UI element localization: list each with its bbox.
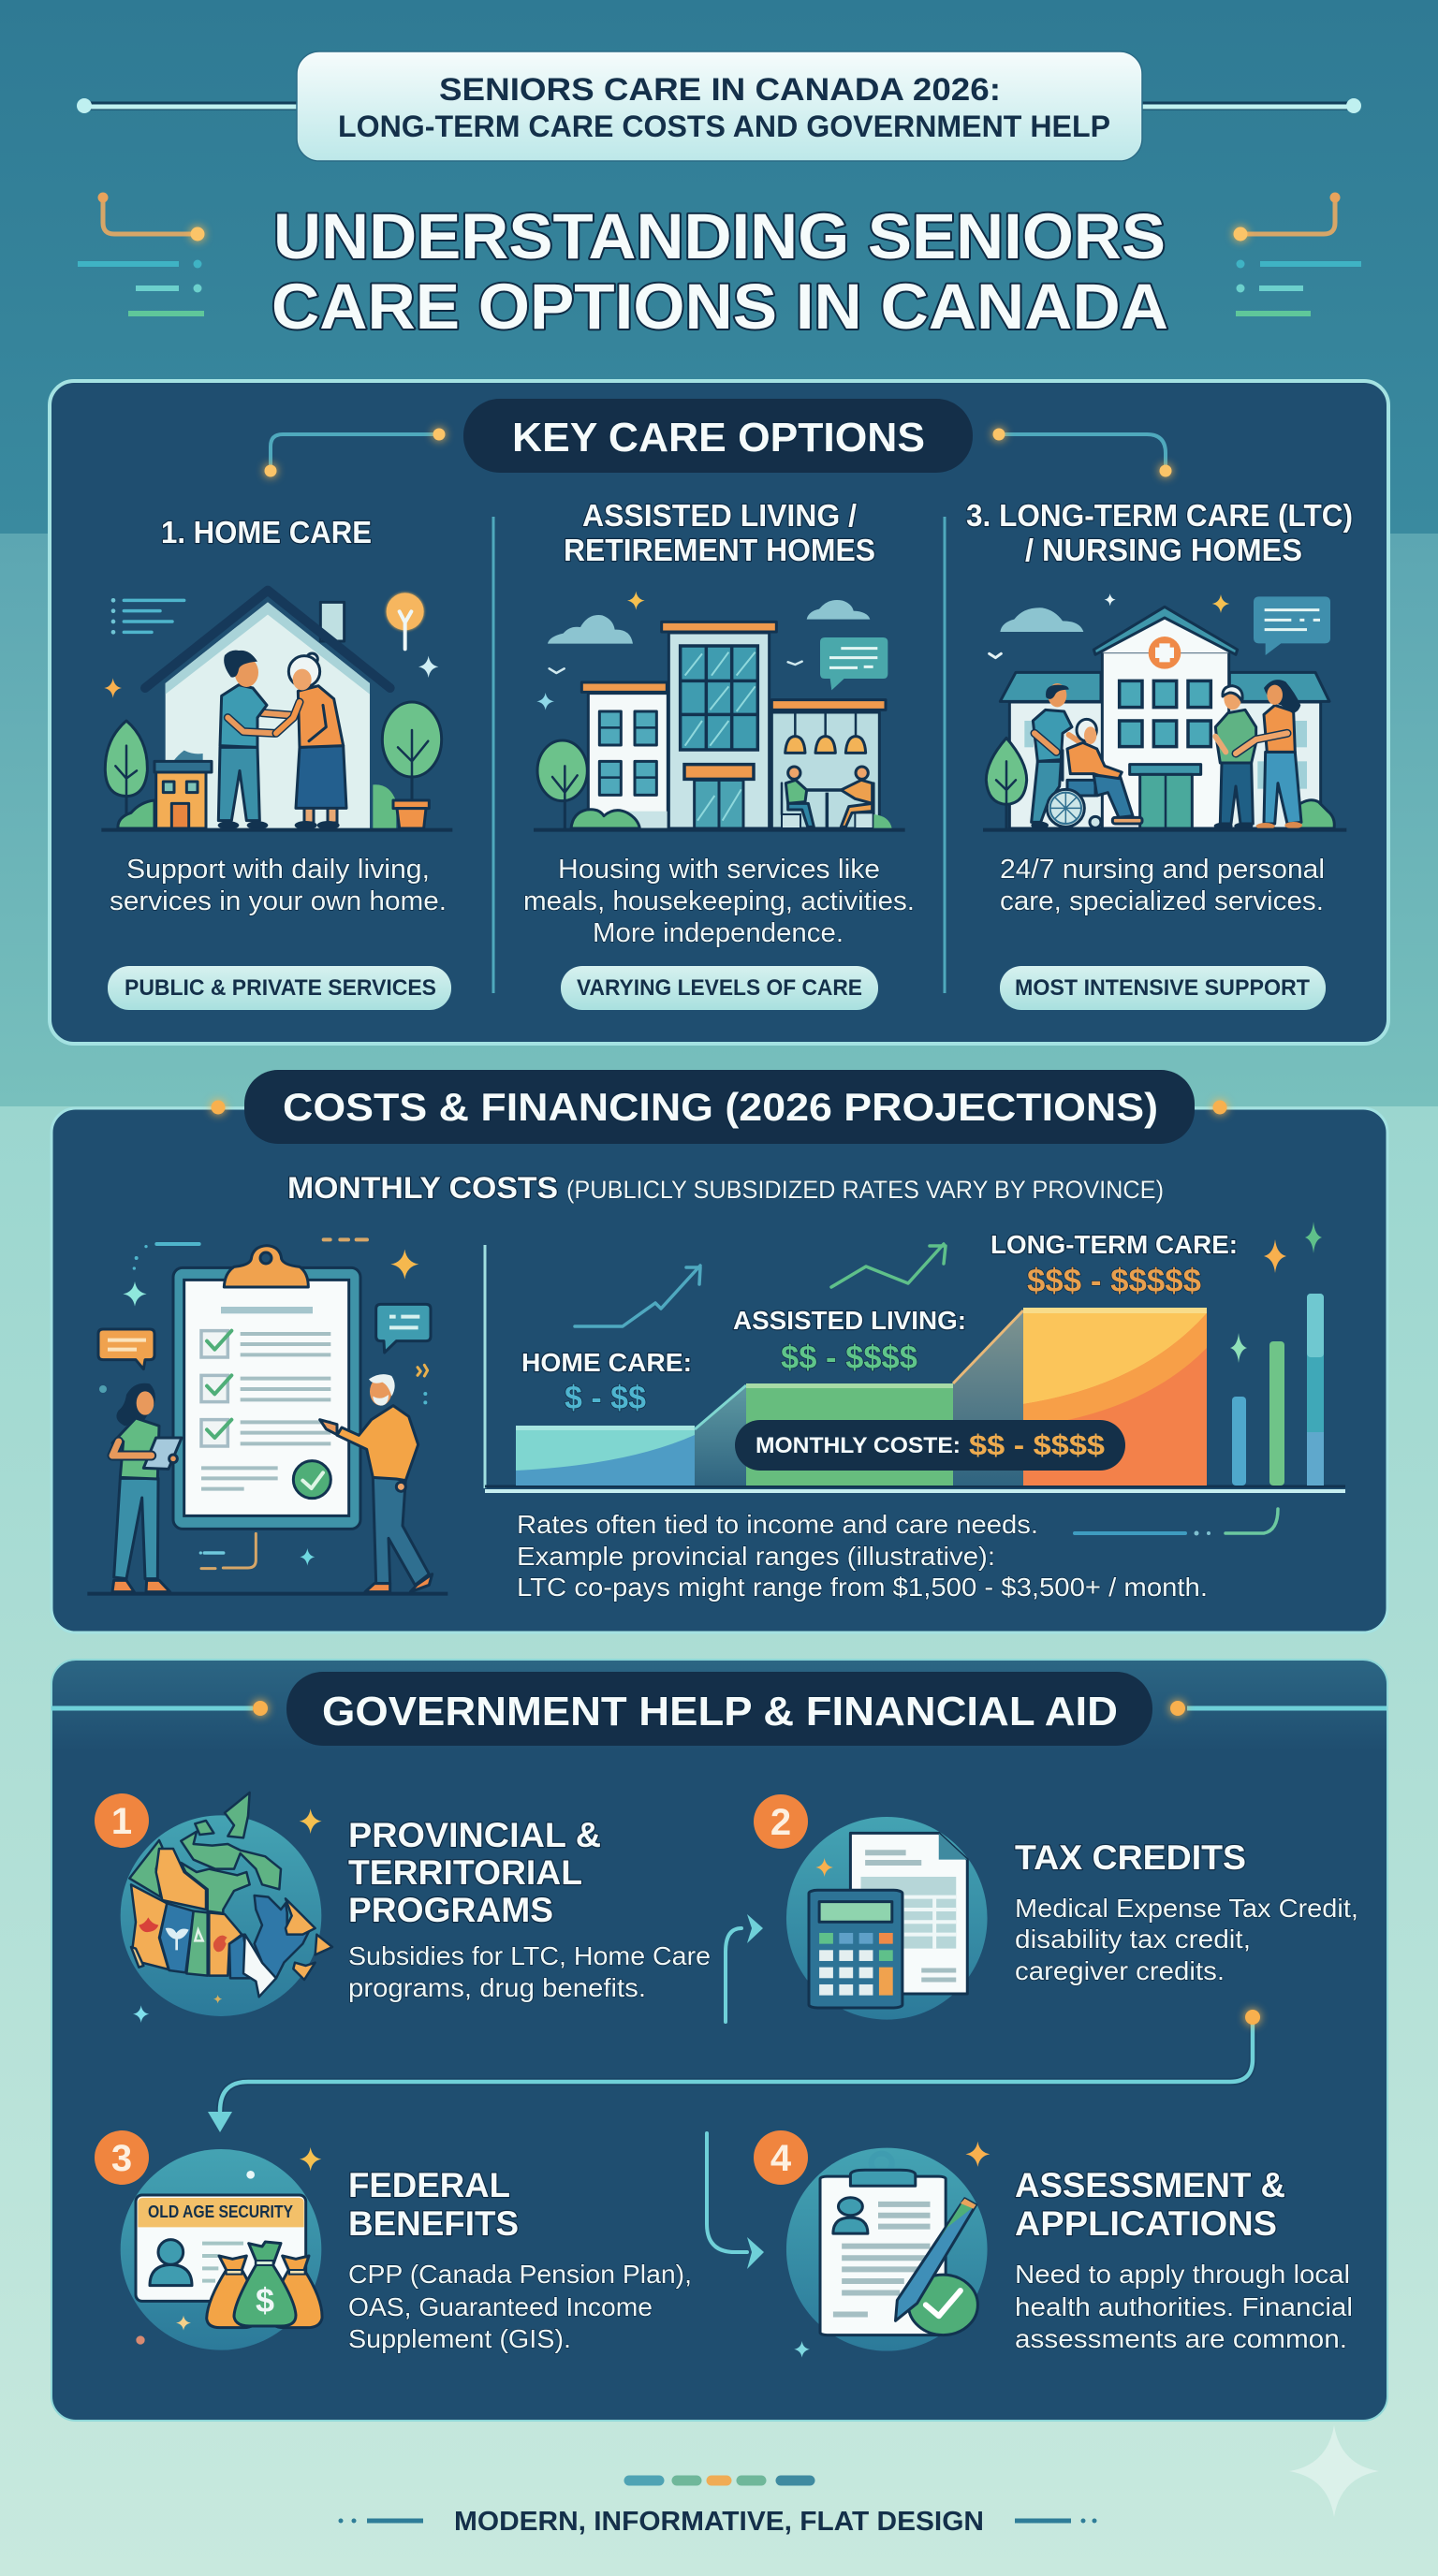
heading: government help <box>51 1672 1387 1746</box>
dollar sign on bag: $ <box>256 2281 274 2320</box>
arrow: item 2 to item 3 <box>208 2010 1260 2132</box>
nurse and wheelchair <box>1031 683 1142 829</box>
number badge 3: 3 <box>111 2138 132 2179</box>
label: assisted living: $$ - $$$$ <box>781 1339 917 1376</box>
main title: UNDERSTANDING SENIORS <box>273 200 1166 272</box>
right tree and pot <box>373 702 442 828</box>
pill: public and private services <box>108 966 451 1010</box>
visiting family <box>1214 680 1302 829</box>
number badge 1: 1 <box>111 1801 132 1842</box>
column heading: long-term care: 3. LONG-TERM CARE (LTC) <box>966 498 1353 533</box>
label: home care: $ - $$ <box>565 1380 646 1416</box>
callout: monthly cost: $$ - $$$$ <box>969 1428 1105 1461</box>
label: long-term care: $$$ - $$$$$ <box>1027 1263 1201 1299</box>
title: assessment and applications <box>1015 2166 1285 2243</box>
chat bubble <box>1254 596 1330 655</box>
title: federal benefits: FEDERAL <box>348 2166 510 2204</box>
connectors to columns <box>264 429 1172 477</box>
title: assessment and applications: APPLICATIONS <box>1015 2204 1277 2243</box>
pill: most intensive support <box>1000 966 1326 1010</box>
footer text: MODERN, INFORMATIVE, FLAT DESIGN <box>454 2507 984 2537</box>
text: assessment description <box>1015 2260 1353 2353</box>
item 2: tax credits <box>754 1794 1358 2020</box>
trend arrow: blue <box>575 1266 700 1326</box>
man pointing <box>320 1374 433 1592</box>
text: tax credits description: Medical Expense Tax Credit, <box>1015 1894 1358 1923</box>
trend arrow: green <box>831 1244 946 1287</box>
hospital main <box>1093 607 1238 828</box>
column heading: assisted living: RETIREMENT HOMES <box>564 533 875 567</box>
label: long-term care: LONG-TERM CARE: <box>990 1230 1238 1259</box>
column heading: home care: 1. HOME CARE <box>161 515 372 549</box>
text: federal benefits description: OAS, Guaranteed Income <box>348 2292 653 2321</box>
title: federal benefits <box>348 2166 519 2243</box>
number badge 2: 2 <box>770 1802 791 1843</box>
text: federal benefits description: CPP (Canada Pension Plan), <box>348 2260 692 2289</box>
chat bubbles <box>98 1304 431 1369</box>
title: tax credits: TAX CREDITS <box>1015 1838 1246 1877</box>
panel: key care options <box>50 381 1388 1044</box>
label: home care: HOME CARE: <box>521 1348 692 1377</box>
arrow: item 3 to item 4 <box>707 2133 764 2269</box>
column dividers <box>493 517 945 993</box>
text: home care description: Support with daily living, <box>126 855 430 885</box>
text: long-term care description <box>1000 855 1325 916</box>
text: federal benefits description: Supplement (GIS). <box>348 2324 571 2353</box>
text: tax credits description: disability tax credit, <box>1015 1925 1251 1954</box>
subheading: monthly costs: MONTHLY COSTS <box>287 1171 558 1205</box>
clouds <box>548 600 870 644</box>
icon: calculator and tax form <box>786 1817 988 2020</box>
label: home care <box>521 1348 692 1416</box>
main title: CARE OPTIONS IN CANADA <box>271 271 1168 343</box>
title: provincial and territorial programs: PROVINCIAL & <box>348 1816 601 1854</box>
heading: key care options <box>463 399 973 473</box>
illustration: home care <box>101 591 452 830</box>
item 3: federal benefits <box>95 2130 692 2353</box>
callout: monthly cost <box>735 1420 1125 1471</box>
small trend bars <box>1232 1294 1324 1486</box>
text: federal benefits description <box>348 2260 692 2353</box>
text: home care description: services in your own home. <box>110 886 447 916</box>
icon: old age security card and money bags <box>121 2147 322 2350</box>
column heading: assisted living <box>564 498 875 567</box>
number badge 1 <box>95 1793 149 1848</box>
label: assisted living: ASSISTED LIVING: <box>733 1306 966 1335</box>
text: home care description <box>110 855 447 916</box>
title banner: LONG-TERM CARE COSTS AND GOVERNMENT HELP <box>338 110 1110 143</box>
tall tower <box>662 622 776 828</box>
number badge 4: 4 <box>770 2138 792 2179</box>
number badge 2 <box>754 1794 808 1849</box>
decorative circuit right <box>1234 193 1361 314</box>
text: rates note: LTC co-pays might range from $1,500 - $3,500+ / month. <box>517 1573 1208 1602</box>
text: rates note <box>517 1510 1208 1602</box>
left wing <box>571 682 668 828</box>
decoration: note connector <box>1075 1509 1278 1535</box>
text: assisted living description: More independence. <box>593 918 844 948</box>
woman with tablet <box>112 1383 182 1592</box>
column heading: long-term care: / NURSING HOMES <box>1025 533 1302 567</box>
text: assisted living description: Housing with services like <box>558 855 880 885</box>
bar: home care <box>516 1426 695 1486</box>
column heading: assisted living: ASSISTED LIVING / <box>582 498 857 533</box>
chart: monthly cost steps <box>485 1222 1345 1491</box>
footer <box>339 2425 1379 2537</box>
number badge 4 <box>754 2130 808 2185</box>
item 1: provincial and territorial programs <box>95 1793 711 2023</box>
panel: costs and financing <box>51 1070 1387 1632</box>
panel: government help and financial aid <box>51 1660 1387 2421</box>
title: provincial and territorial programs: PROGRAMS <box>348 1891 553 1929</box>
left tree <box>105 721 147 817</box>
heading: government help: GOVERNMENT HELP & FINANCIAL AID <box>322 1689 1118 1734</box>
label: long-term care <box>990 1230 1238 1299</box>
title: assessment and applications: ASSESSMENT & <box>1015 2166 1285 2204</box>
icon: application clipboard with pen <box>786 2142 990 2358</box>
item 4: assessment and applications <box>754 2130 1353 2358</box>
title banner: SENIORS CARE IN CANADA 2026: <box>439 72 1001 108</box>
label: assisted living <box>733 1306 966 1376</box>
pill: varying levels of care: VARYING LEVELS OF CARE <box>577 975 862 1001</box>
tree and bush <box>986 738 1334 828</box>
text: assessment description: health authorities. Financial <box>1015 2292 1353 2321</box>
text: programs description: programs, drug benefits. <box>348 1973 646 2002</box>
bar: assisted living <box>746 1383 953 1486</box>
text: assessment description: Need to apply through local <box>1015 2260 1350 2289</box>
text: tax credits description <box>1015 1894 1358 1985</box>
colour dashes <box>629 2475 810 2486</box>
cloud <box>1000 607 1083 632</box>
icon: canada map <box>121 1793 332 2023</box>
text: long-term care description: care, specialized services. <box>1000 886 1324 916</box>
pill: public and private services: PUBLIC & PRIVATE SERVICES <box>125 975 436 1001</box>
subheading: monthly costs <box>287 1171 1164 1205</box>
text: long-term care description: 24/7 nursing and personal <box>1000 855 1325 885</box>
tree <box>537 740 587 828</box>
slope: assisted to long-term <box>953 1310 1023 1486</box>
pill: varying levels of care <box>561 966 878 1010</box>
subheading: monthly costs: (PUBLICLY SUBSIDIZED RATES VARY BY PROVINCE) <box>566 1176 1164 1204</box>
arrow: item 1 to item 2 <box>726 1914 763 2022</box>
sparkles <box>1230 1222 1322 1363</box>
heading: key care options: KEY CARE OPTIONS <box>512 415 925 461</box>
heading: costs and financing <box>212 1070 1226 1144</box>
text: tax credits description: caregiver credits. <box>1015 1956 1225 1985</box>
clipboard <box>173 1246 360 1529</box>
card label: old age security: OLD AGE SECURITY <box>148 2203 293 2221</box>
column heading: long-term care <box>966 498 1353 567</box>
text: programs description <box>348 1941 711 2002</box>
pill: most intensive support: MOST INTENSIVE SUPPORT <box>1015 975 1310 1001</box>
main title <box>271 200 1168 343</box>
callout: monthly cost: MONTHLY COSTE: <box>756 1433 961 1458</box>
text: assisted living description <box>523 855 915 948</box>
title: provincial and territorial programs: TERRITORIAL <box>348 1853 582 1892</box>
text: programs description: Subsidies for LTC, Home Care <box>348 1941 711 1970</box>
number badge 3 <box>95 2130 149 2185</box>
chat bubble <box>820 637 888 690</box>
text: assisted living description: meals, housekeeping, activities. <box>523 886 915 916</box>
title: provincial and territorial programs <box>348 1816 601 1929</box>
footer rules <box>339 2518 1097 2524</box>
small house <box>118 751 212 828</box>
text: assessment description: assessments are common. <box>1015 2324 1347 2353</box>
decorative star <box>1289 2425 1379 2517</box>
caregiver <box>218 651 290 829</box>
illustration: assisted living <box>534 592 905 830</box>
hospital wings <box>1000 672 1329 828</box>
illustration: long-term care <box>983 593 1346 830</box>
decorative circuit left <box>78 193 204 314</box>
title banner <box>77 51 1361 161</box>
text: rates note: Rates often tied to income and care needs. <box>517 1510 1038 1539</box>
right wing <box>771 700 892 828</box>
illustration: clipboard with two people <box>87 1239 448 1594</box>
bar: long-term care <box>1023 1308 1207 1486</box>
text: rates note: Example provincial ranges (illustrative): <box>517 1542 995 1571</box>
slope: home to assisted <box>695 1385 746 1486</box>
heading: costs and financing: COSTS & FINANCING (2026 PROJECTIONS) <box>283 1085 1158 1129</box>
title: federal benefits: BENEFITS <box>348 2204 519 2243</box>
senior woman <box>276 653 346 829</box>
